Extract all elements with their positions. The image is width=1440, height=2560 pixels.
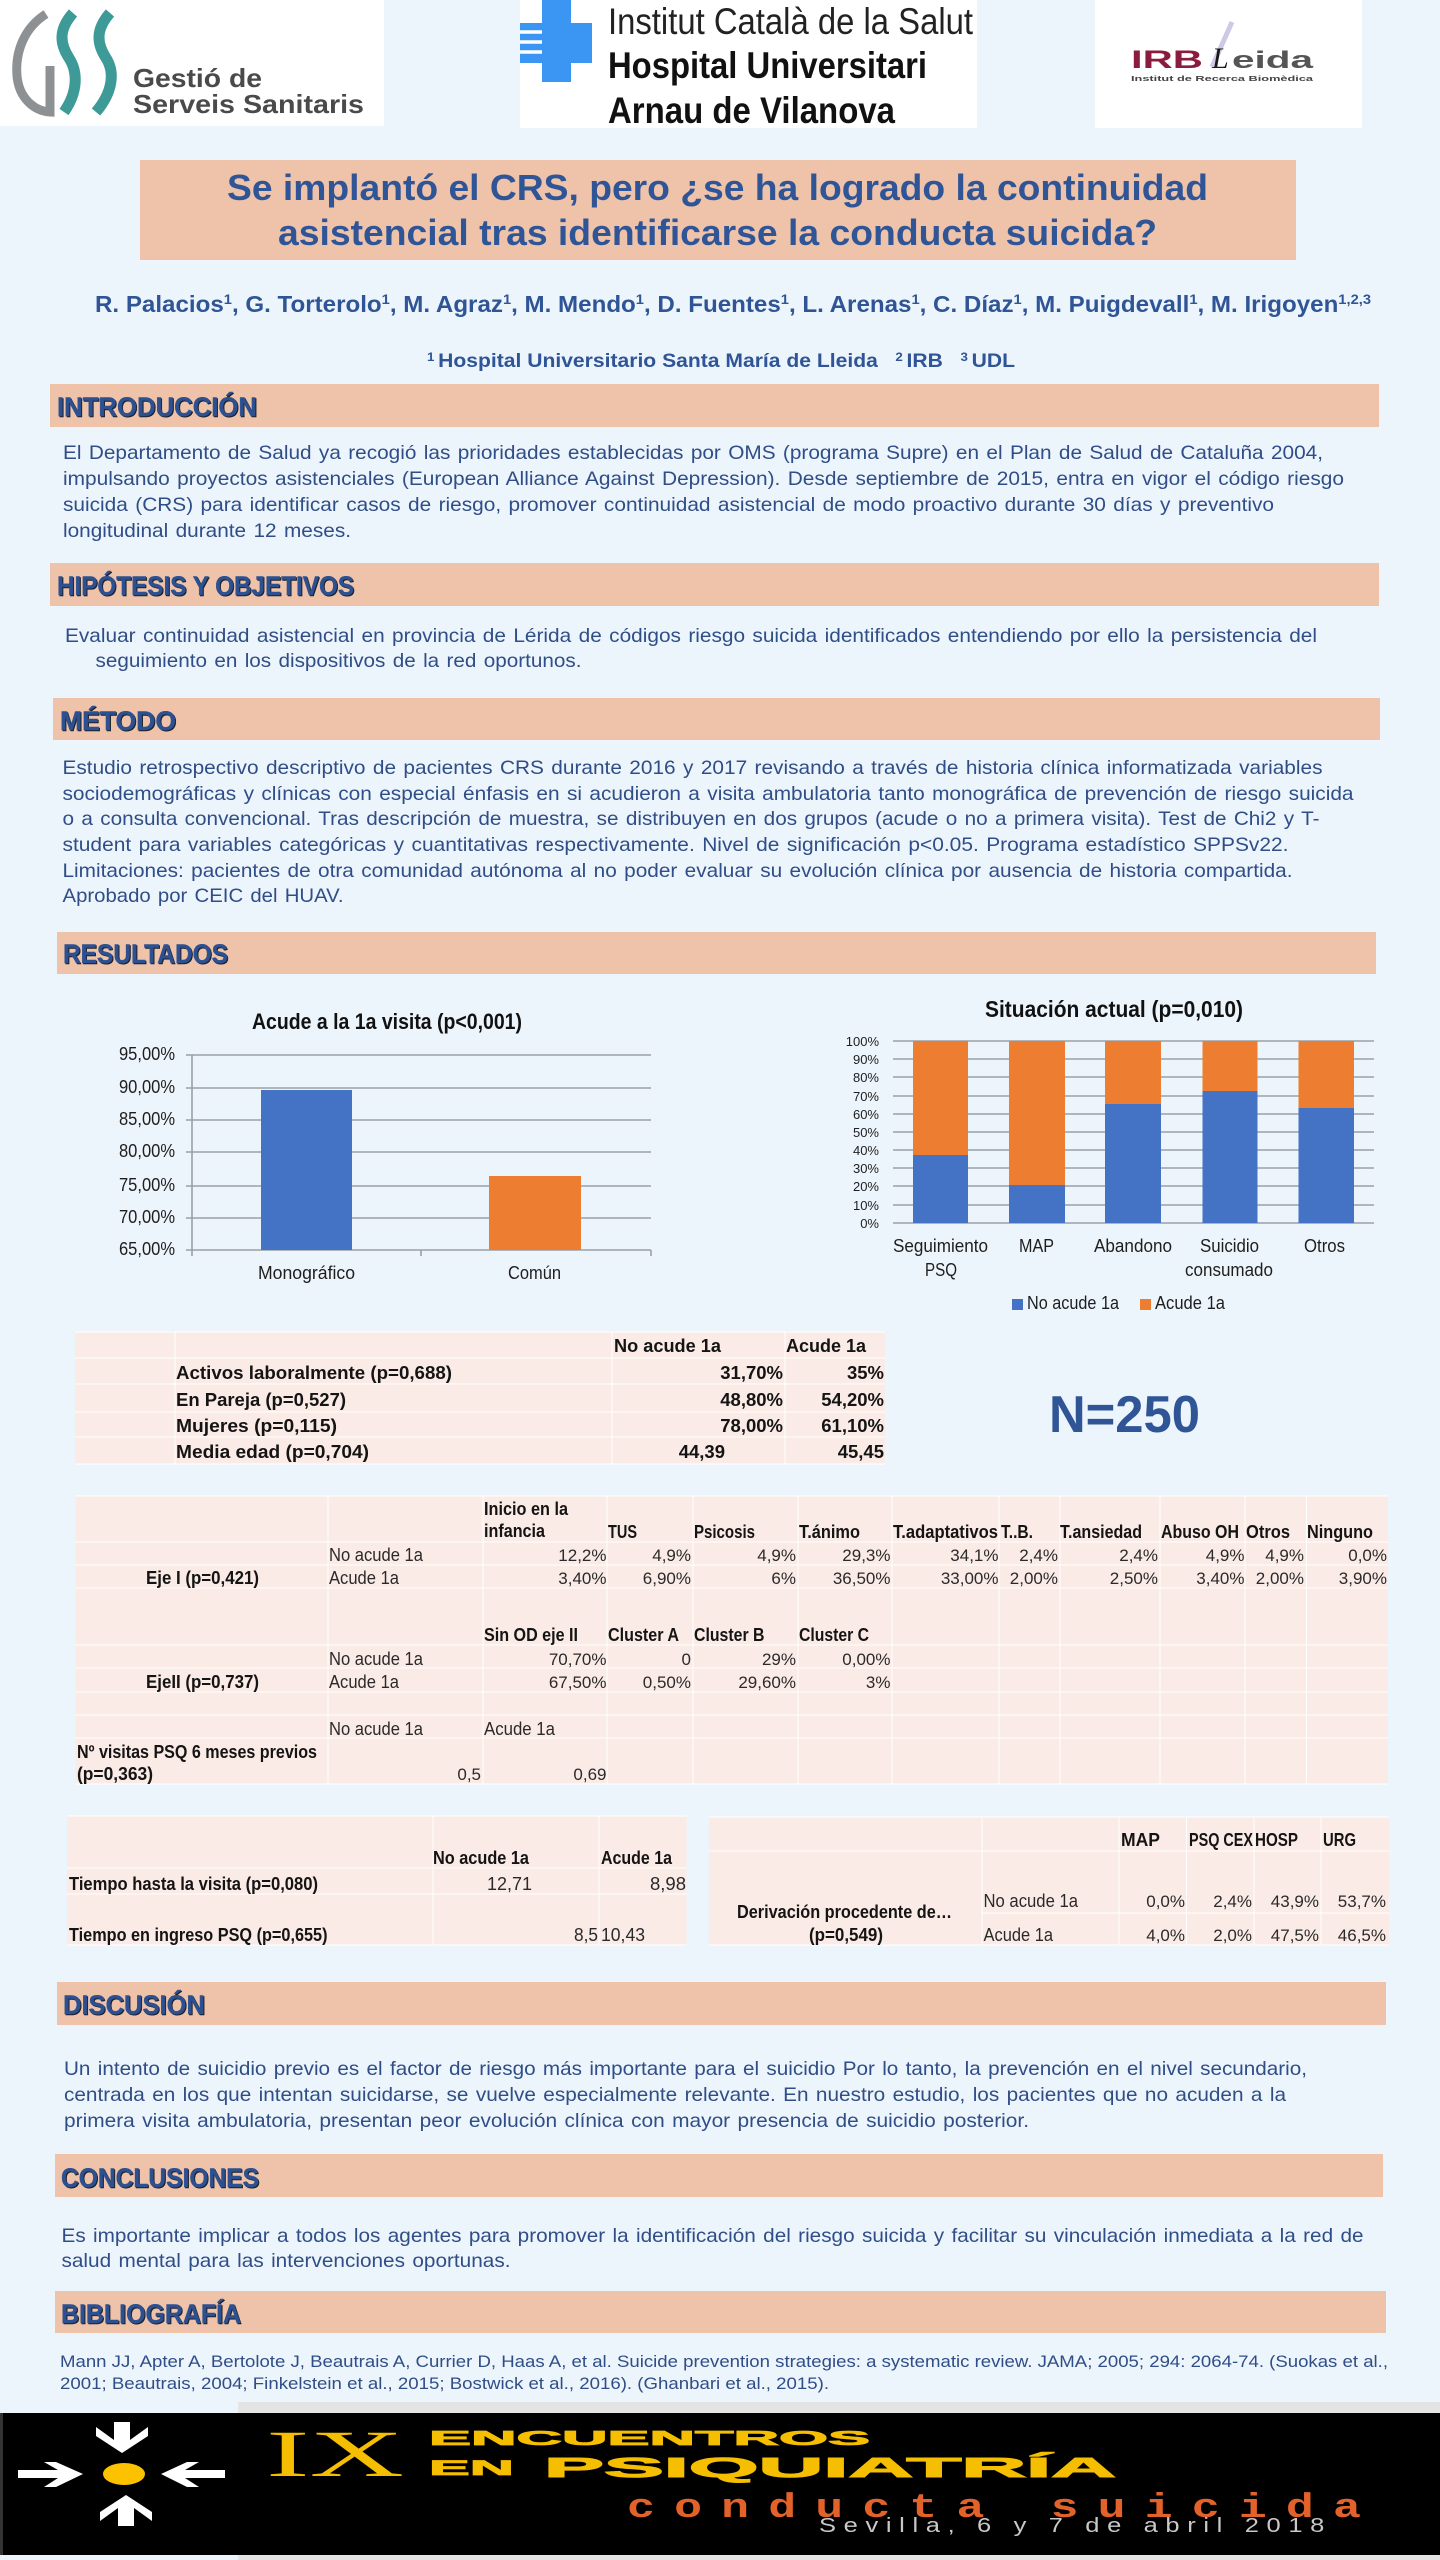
table: derivación <box>709 1817 1389 1945</box>
logo: IRB Lleida: IRB <box>1131 46 1203 74</box>
table: eje I, eje II y visitas previas: Psicosis <box>694 1521 755 1542</box>
table: derivación: (p=0,549) <box>809 1924 883 1945</box>
bar chart: acude a la 1a visita: 75,00% <box>119 1174 175 1195</box>
authors: , L. Arenas <box>789 291 911 317</box>
text: bibliografía: Mann JJ, Apter A, Bertolote J, Beautrais A, Currier D, Haas A, et al. Suicide prevention strategies: a systematic review. JAMA; 2005; 294: 2064-74. (Suokas et al., <box>60 2352 1388 2371</box>
heading: resultados: RESULTADOS <box>63 939 228 969</box>
authors: , M. Irigoyen <box>1198 291 1338 317</box>
table: características sociodemográficas: No acude 1a <box>614 1335 722 1356</box>
text: conclusiones <box>62 2225 1364 2272</box>
table: eje I, eje II y visitas previas: Otros <box>1246 1521 1290 1542</box>
table: eje I, eje II y visitas previas: 2,4% <box>1019 1546 1058 1565</box>
bar chart: acude a la 1a visita: 95,00% <box>119 1043 175 1064</box>
stacked bar chart: situación actual: 50% <box>853 1125 879 1140</box>
table: eje I, eje II y visitas previas: 0,00% <box>842 1650 890 1669</box>
bar chart: acude a la 1a visita: 85,00% <box>119 1108 175 1129</box>
heading: introducción: INTRODUCCIÓN <box>57 391 257 422</box>
table: características sociodemográficas: Acude 1a <box>786 1335 867 1356</box>
authors: 1 <box>636 291 644 307</box>
footer banner: IX Encuentros en Psiquiatría: conducta suicida <box>627 2490 1380 2528</box>
text: bibliografía <box>60 2352 1388 2393</box>
table: eje I, eje II y visitas previas: Inicio en la <box>484 1498 569 1519</box>
authors: 1,2,3 <box>1338 291 1371 307</box>
table: derivación: Derivación procedente de… <box>737 1901 952 1922</box>
table: tiempos: 10,43 <box>601 1925 645 1945</box>
stacked bar chart: situación actual: 90% <box>853 1052 879 1067</box>
stacked bar chart: situación actual: Seguimiento <box>893 1235 988 1256</box>
stacked bar chart: situación actual: 80% <box>853 1070 879 1085</box>
text: método <box>62 757 1354 907</box>
table: derivación: HOSP <box>1255 1829 1298 1850</box>
logo: Hospital Universitari Arnau de Vilanova <box>520 0 977 131</box>
table: derivación: 2,4% <box>1213 1892 1252 1911</box>
table: eje I, eje II y visitas previas: (p=0,363) <box>77 1763 153 1784</box>
table: derivación: 53,7% <box>1338 1892 1386 1911</box>
logo: IRB Lleida: eida <box>1232 47 1314 74</box>
table: eje I, eje II y visitas previas: Eje I (p=0,421) <box>146 1567 259 1588</box>
authors: , M. Puigdevall <box>1022 291 1189 317</box>
table: eje I, eje II y visitas previas: Acude 1a <box>484 1719 556 1739</box>
text: introducción <box>63 442 1344 542</box>
table: eje I, eje II y visitas previas: 3% <box>866 1673 890 1692</box>
table: características sociodemográficas: Media edad (p=0,704) <box>176 1441 369 1462</box>
legend <box>1012 1292 1226 1313</box>
table: características sociodemográficas: 48,80% <box>720 1389 783 1410</box>
panel: bibliografía <box>55 2291 1388 2393</box>
table: eje I, eje II y visitas previas: T.ansiedad <box>1060 1521 1142 1542</box>
table: eje I, eje II y visitas previas: Acude 1a <box>329 1672 400 1692</box>
text: discusión <box>64 2058 1307 2132</box>
table: tiempos: No acude 1a <box>433 1847 530 1868</box>
text: introducción: El Departamento de Salud ya recogió las prioridades establecidas por OMS (programa Supre) en el Plan de Salud de Cataluña 2004, <box>63 442 1323 464</box>
table: eje I, eje II y visitas previas: 2,50% <box>1110 1569 1158 1588</box>
bar chart: acude a la 1a visita: 70,00% <box>119 1206 175 1227</box>
table: eje I, eje II y visitas previas: EjeII (p=0,737) <box>146 1671 259 1692</box>
table: eje I, eje II y visitas previas: Acude 1a <box>329 1568 400 1588</box>
table: eje I, eje II y visitas previas: Nº visitas PSQ 6 meses previos <box>77 1741 317 1762</box>
bar chart: acude a la 1a visita: Común <box>508 1262 561 1283</box>
title: Se implantó el CRS, pero ¿se ha logrado la continuidad <box>227 167 1208 208</box>
callout: N=250: N=250 <box>1049 1386 1200 1444</box>
table: tiempos <box>67 1816 686 1945</box>
table: derivación: PSQ CEX <box>1189 1829 1254 1850</box>
stacked bar chart: situación actual: 70% <box>853 1089 879 1104</box>
text: conclusiones: salud mental para las intervenciones oportunas. <box>62 2250 510 2272</box>
logo: Hospital Universitari Arnau de Vilanova: Institut Català de la Salut <box>608 1 974 42</box>
text: discusión: primera visita ambulatoria, presentan peor evolución clínica con mayor presencia de suicidio posterior. <box>64 2110 1029 2132</box>
table: características sociodemográficas: 35% <box>847 1362 884 1383</box>
panel: hipótesis y objetivos <box>50 563 1379 672</box>
heading: método: MÉTODO <box>60 705 176 736</box>
table: eje I, eje II y visitas previas: 0,0% <box>1348 1546 1387 1565</box>
table: eje I, eje II y visitas previas: No acude 1a <box>329 1719 424 1739</box>
authors: 1 <box>1189 291 1198 307</box>
authors: , M. Mendo <box>511 291 636 317</box>
heading: discusión: DISCUSIÓN <box>63 1989 205 2020</box>
logo: IRB Lleida <box>1095 0 1362 128</box>
bar chart: acude a la 1a visita: 90,00% <box>119 1076 175 1097</box>
authors: 1 <box>224 291 232 307</box>
table: características sociodemográficas: En Pareja (p=0,527) <box>176 1389 346 1410</box>
affiliations: 3 <box>960 350 972 364</box>
text: introducción: suicida (CRS) para identificar casos de riesgo, promover continuidad asistencial de modo proactivo durante 30 días y preventivo <box>63 494 1274 516</box>
table: derivación: 47,5% <box>1271 1926 1319 1945</box>
table: derivación: 46,5% <box>1338 1926 1386 1945</box>
text: discusión: centrada en los que intentan suicidarse, se vuelve especialmente relevante. En nuestro estudio, los pacientes que no acuden a la <box>64 2084 1286 2106</box>
text: bibliografía: 2001; Beautrais, 2004; Finkelstein et al., 2015; Bostwick et al., 2016). (Ghanbari et al., 2015). <box>60 2374 829 2393</box>
authors: 1 <box>911 291 920 307</box>
authors: 1 <box>382 291 390 307</box>
table: derivación: No acude 1a <box>984 1891 1079 1911</box>
table: derivación: URG <box>1323 1829 1356 1850</box>
table: eje I, eje II y visitas previas: 34,1% <box>950 1546 998 1565</box>
text: discusión: Un intento de suicidio previo es el factor de riesgo más importante para el suicidio Por lo tanto, la prevención en el nivel secundario, <box>64 2058 1307 2080</box>
table: eje I, eje II y visitas previas: Abuso OH <box>1161 1521 1239 1542</box>
stacked bar chart: situación actual: consumado <box>1185 1259 1273 1280</box>
text: introducción: impulsando proyectos asistenciales (European Alliance Against Depression). Desde septiembre de 2015, entra en vigor el código riesgo <box>63 468 1344 490</box>
text: método: Limitaciones: pacientes de otra comunidad autónoma al no poder evaluar su evolución clínica por ausencia de historia compartida. <box>62 860 1292 882</box>
footer banner: IX Encuentros en Psiquiatría: ENCUENTROS <box>429 2428 870 2450</box>
logo: IRB Lleida: L <box>1211 42 1229 75</box>
table: derivación: 43,9% <box>1271 1892 1319 1911</box>
text: método: student para variables categóricas y cuantitativas respectivamente. Nivel de significación p<0.05. Programa estadístico SPPSv22. <box>62 834 1288 856</box>
stacked bar chart: situación actual: 10% <box>853 1198 879 1213</box>
text: hipótesis y objetivos: seguimiento en los dispositivos de la red oportunos. <box>96 650 582 672</box>
heading: hipótesis y objetivos: HIPÓTESIS Y OBJETIVOS <box>57 570 354 601</box>
table: eje I, eje II y visitas previas: T..B. <box>1001 1521 1033 1542</box>
table: eje I, eje II y visitas previas: 4,9% <box>652 1546 691 1565</box>
table: eje I, eje II y visitas previas: Ninguno <box>1307 1521 1373 1542</box>
table: derivación: 4,0% <box>1146 1926 1185 1945</box>
footer banner: IX Encuentros en Psiquiatría: PSIQUIATRÍA <box>544 2452 1116 2483</box>
table: eje I, eje II y visitas previas: 2,00% <box>1256 1569 1304 1588</box>
logo: IRB Lleida: Institut de Recerca Biomèdica <box>1131 74 1314 83</box>
table: eje I, eje II y visitas previas: Cluster A <box>608 1624 679 1645</box>
text: conclusiones: Es importante implicar a todos los agentes para promover la identificación del riesgo suicida y facilitar su vinculación inmediata a la red de <box>62 2225 1364 2247</box>
table: características sociodemográficas: 44,39 <box>679 1441 725 1462</box>
logo: Hospital Universitari Arnau de Vilanova: Hospital Universitari <box>608 45 927 86</box>
text: introducción: longitudinal durante 12 meses. <box>63 520 351 542</box>
table: derivación: MAP <box>1121 1829 1160 1850</box>
table: eje I, eje II y visitas previas: Sin OD eje II <box>484 1624 578 1645</box>
table: tiempos: Tiempo en ingreso PSQ (p=0,655) <box>69 1924 328 1945</box>
text: hipótesis y objetivos <box>65 625 1317 672</box>
table: características sociodemográficas: 45,45 <box>838 1441 884 1462</box>
table: características sociodemográficas: Mujeres (p=0,115) <box>176 1415 337 1436</box>
panel: conclusiones <box>55 2154 1383 2272</box>
table: eje I, eje II y visitas previas <box>76 1496 1388 1784</box>
stacked bar chart: situación actual: Suicidio <box>1200 1235 1259 1256</box>
table: eje I, eje II y visitas previas: 2,4% <box>1119 1546 1158 1565</box>
table: características sociodemográficas <box>75 1332 885 1464</box>
table: eje I, eje II y visitas previas: 67,50% <box>549 1673 606 1692</box>
affiliations: IRB <box>907 351 960 372</box>
bar chart: acude a la 1a visita: Monográfico <box>258 1262 355 1283</box>
legend: No acude 1a <box>1027 1292 1120 1313</box>
text: método: o a consulta convencional. Tras descripción de muestra, se distribuyen en dos grupos (acude o no a primera visita). Test de Chi2 y T- <box>62 808 1320 830</box>
table: tiempos: 8,98 <box>650 1874 686 1894</box>
affiliations: 1 <box>427 350 438 364</box>
text: método: Aprobado por CEIC del HUAV. <box>62 885 344 907</box>
affiliations: 2 <box>895 350 907 364</box>
footer banner: IX Encuentros en Psiquiatría: EN <box>429 2457 514 2480</box>
table: eje I, eje II y visitas previas: 4,9% <box>1265 1546 1304 1565</box>
stacked bar chart: situación actual: Otros <box>1304 1235 1345 1256</box>
logo: Gestió de Serveis Sanitaris: Gestió de <box>133 63 262 93</box>
bar chart: acude a la 1a visita: 65,00% <box>119 1238 175 1259</box>
stacked bar chart: situación actual: 60% <box>853 1107 879 1122</box>
table: eje I, eje II y visitas previas: 6% <box>771 1569 796 1588</box>
table: derivación: Acude 1a <box>984 1925 1054 1945</box>
table: eje I, eje II y visitas previas: 0,50% <box>643 1673 691 1692</box>
table: eje I, eje II y visitas previas: 29,60% <box>738 1673 796 1692</box>
table: eje I, eje II y visitas previas: TUS <box>608 1521 637 1542</box>
table: eje I, eje II y visitas previas: T.adaptativos <box>893 1521 998 1542</box>
table: derivación: 0,0% <box>1146 1892 1185 1911</box>
stacked bar chart: situación actual: 40% <box>853 1143 879 1158</box>
table: tiempos: 8,5 <box>574 1925 598 1945</box>
table: tiempos: Acude 1a <box>601 1847 673 1868</box>
title <box>140 160 1296 260</box>
table: eje I, eje II y visitas previas: 4,9% <box>757 1546 796 1565</box>
footer banner: IX Encuentros en Psiquiatría: Sevilla, 6 y 7 de abril 2018 <box>819 2515 1332 2537</box>
table: eje I, eje II y visitas previas: 4,9% <box>1206 1546 1244 1565</box>
text: método: sociodemográficas y clínicas con especial énfasis en si acudieron a visita ambulatoria tanto monográfica de prevención de riesgo suicida <box>62 783 1354 805</box>
stacked bar chart: situación actual: 30% <box>853 1161 879 1176</box>
table: eje I, eje II y visitas previas: 70,70% <box>549 1650 606 1669</box>
authors: R. Palacios <box>95 291 218 317</box>
bar chart: acude a la 1a visita <box>119 1009 651 1283</box>
table: tiempos: 12,71 <box>487 1874 532 1894</box>
authors: 1 <box>781 291 789 307</box>
affiliations: UDL <box>972 351 1015 372</box>
table: eje I, eje II y visitas previas: Cluster C <box>799 1624 869 1645</box>
table: eje I, eje II y visitas previas: 29,3% <box>842 1546 890 1565</box>
table: eje I, eje II y visitas previas: infancia <box>484 1520 546 1541</box>
logo: Hospital Universitari Arnau de Vilanova: Arnau de Vilanova <box>608 90 895 131</box>
table: eje I, eje II y visitas previas: T.ánimo <box>799 1521 860 1542</box>
authors: , C. Díaz <box>920 291 1014 317</box>
table: características sociodemográficas: 78,00% <box>720 1415 783 1436</box>
logo: Gestió de Serveis Sanitaris: Serveis Sanitaris <box>133 89 364 119</box>
table: eje I, eje II y visitas previas: 12,2% <box>558 1546 606 1565</box>
panel: método <box>53 698 1380 907</box>
authors: 1 <box>1014 291 1022 307</box>
bar chart: acude a la 1a visita: 80,00% <box>119 1140 175 1161</box>
heading: conclusiones: CONCLUSIONES <box>61 2163 259 2193</box>
table: eje I, eje II y visitas previas: 33,00% <box>941 1569 998 1588</box>
stacked bar chart: situación actual: 100% <box>846 1034 879 1049</box>
table: eje I, eje II y visitas previas: No acude 1a <box>329 1545 424 1565</box>
table: eje I, eje II y visitas previas: 3,40% <box>558 1569 606 1588</box>
stacked bar chart: situación actual <box>846 996 1374 1313</box>
table: eje I, eje II y visitas previas: 0,69 <box>573 1765 606 1784</box>
footer banner: IX Encuentros en Psiquiatría: IX <box>266 2418 404 2491</box>
stacked bar chart: situación actual: Abandono <box>1094 1235 1172 1256</box>
authors: , D. Fuentes <box>644 291 781 317</box>
stacked bar chart: situación actual: 20% <box>853 1179 879 1194</box>
footer banner: IX Encuentros en Psiquiatría <box>0 2402 1440 2560</box>
heading: resultados <box>57 932 1376 974</box>
table: tiempos: Tiempo hasta la visita (p=0,080) <box>69 1873 318 1894</box>
affiliations: Hospital Universitario Santa María de Lleida <box>438 351 895 372</box>
table: eje I, eje II y visitas previas: 36,50% <box>833 1569 890 1588</box>
table: eje I, eje II y visitas previas: 0,5 <box>457 1765 481 1784</box>
bar chart: acude a la 1a visita: Acude a la 1a visita (p<0,001) <box>252 1009 522 1034</box>
panel: introducción <box>50 384 1379 542</box>
table: eje I, eje II y visitas previas: 3,40% <box>1196 1569 1244 1588</box>
table: eje I, eje II y visitas previas: 3,90% <box>1339 1569 1387 1588</box>
text: método: Estudio retrospectivo descriptivo de pacientes CRS durante 2016 y 2017 revisando a través de historia clínica informatizada variables <box>62 757 1323 779</box>
authors: , M. Agraz <box>390 291 503 317</box>
table: eje I, eje II y visitas previas: Cluster B <box>694 1624 764 1645</box>
authors: , G. Torterolo <box>232 291 382 317</box>
panel: discusión <box>57 1982 1386 2132</box>
icon: converging arrows <box>18 2422 225 2526</box>
stacked bar chart: situación actual: 0% <box>860 1216 879 1231</box>
stacked bar chart: situación actual: Situación actual (p=0,010) <box>985 996 1243 1022</box>
table: eje I, eje II y visitas previas: 2,00% <box>1010 1569 1058 1588</box>
title: asistencial tras identificarse la conducta suicida? <box>278 212 1157 253</box>
table: derivación: 2,0% <box>1213 1926 1252 1945</box>
text: hipótesis y objetivos: Evaluar continuidad asistencial en provincia de Lérida de códigos riesgo suicida identificados entendiendo por ello la persistencia del <box>65 625 1317 647</box>
stacked bar chart: situación actual: MAP <box>1019 1235 1054 1256</box>
table: características sociodemográficas: 54,20% <box>821 1389 884 1410</box>
stacked bar chart: situación actual: PSQ <box>925 1259 957 1280</box>
table: eje I, eje II y visitas previas: 6,90% <box>643 1569 691 1588</box>
heading: bibliografía: BIBLIOGRAFÍA <box>61 2298 241 2329</box>
table: características sociodemográficas: 31,70% <box>720 1362 783 1383</box>
table: eje I, eje II y visitas previas: 0 <box>682 1650 691 1669</box>
authors: 1 <box>503 291 511 307</box>
table: eje I, eje II y visitas previas: No acude 1a <box>329 1649 424 1669</box>
table: eje I, eje II y visitas previas: 29% <box>762 1650 796 1669</box>
logo: Gestió de Serveis Sanitaris <box>0 0 384 126</box>
table: características sociodemográficas: 61,10% <box>821 1415 884 1436</box>
legend: Acude 1a <box>1155 1292 1226 1313</box>
table: características sociodemográficas: Activos laboralmente (p=0,688) <box>176 1362 452 1383</box>
